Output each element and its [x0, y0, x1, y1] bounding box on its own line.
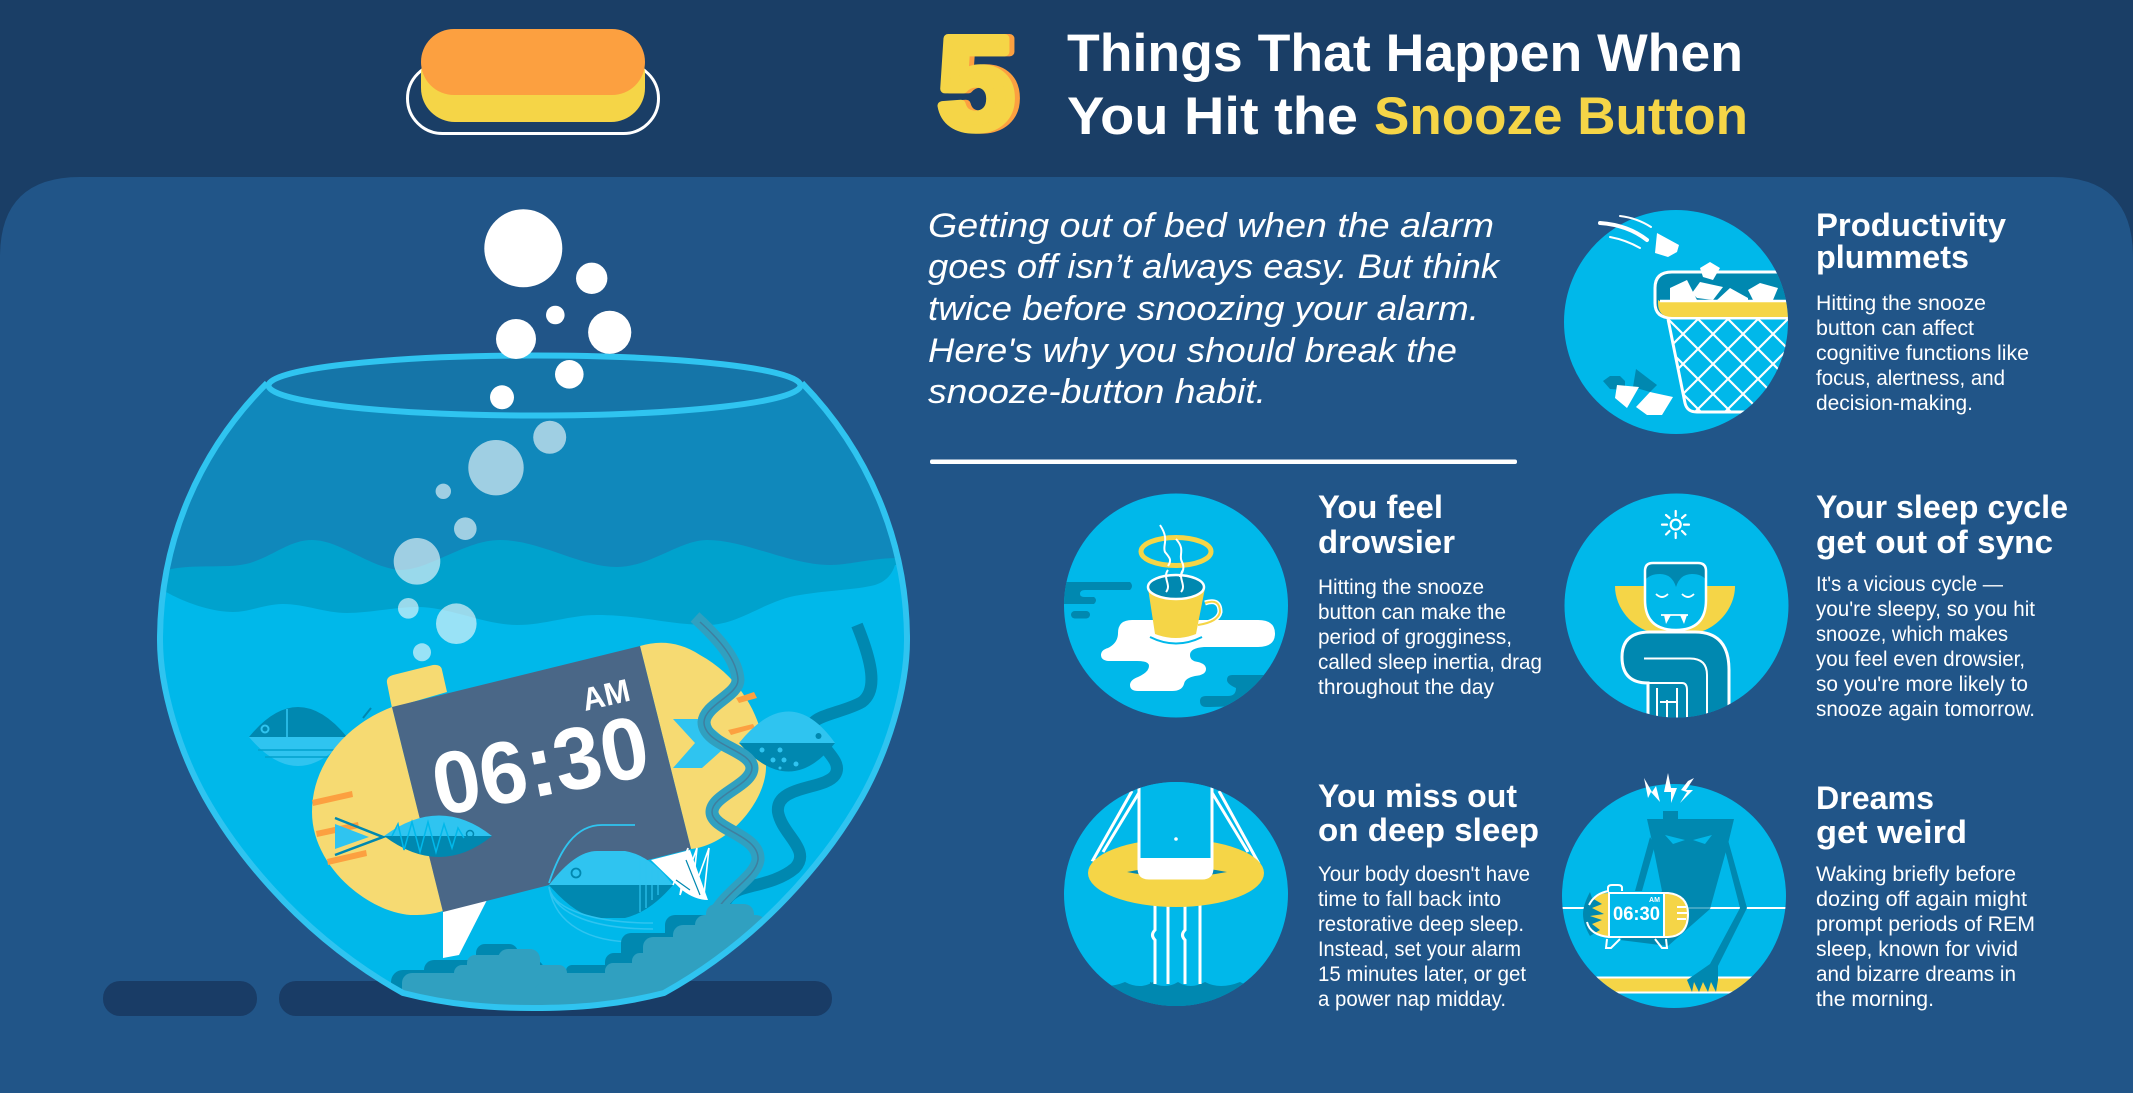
icon: waste basket — [1564, 210, 1800, 434]
body text — [1816, 573, 2035, 721]
panel: you miss out on deep sleep — [1060, 775, 1539, 1016]
clock time: 06:30 — [1613, 904, 1660, 925]
body text: called sleep inertia, drag — [1318, 651, 1542, 674]
body text: button can make the — [1318, 601, 1506, 624]
intro text: Getting out of bed when the alarm — [928, 207, 1494, 245]
icon: snooze button — [408, 29, 658, 134]
intro text — [928, 207, 1501, 411]
heading: get out of sync — [1816, 524, 2053, 560]
body text: period of grogginess, — [1318, 626, 1512, 649]
seaweed: back — [722, 625, 871, 925]
fish: anglerfish — [549, 825, 709, 942]
body text: sleep, known for vivid — [1816, 938, 2018, 961]
alarm clock — [312, 643, 766, 958]
title: Snooze Button — [1374, 87, 1748, 146]
intro text: Here's why you should break the — [928, 332, 1457, 370]
body text: restorative deep sleep. — [1318, 913, 1524, 936]
heading: You miss out — [1318, 778, 1517, 814]
icon: monster and clock — [1562, 773, 1790, 1008]
intro text: twice before snoozing your alarm. — [928, 290, 1479, 328]
icon: phone and swim ring — [1064, 782, 1288, 1006]
clock AM label: AM — [1649, 897, 1660, 904]
heading — [1816, 489, 2068, 560]
body text: you're sleepy, so you hit — [1816, 598, 2035, 621]
heading: Your sleep cycle — [1816, 489, 2068, 525]
table shadows — [103, 981, 832, 1016]
bowl rim — [268, 356, 800, 416]
body text: Your body doesn't have — [1318, 863, 1530, 886]
icon: coffee cup — [1060, 494, 1288, 718]
body text: you feel even drowsier, — [1816, 648, 2025, 671]
bubbles: underwater — [394, 421, 566, 661]
body text: focus, alertness, and — [1816, 367, 2005, 390]
heading — [1318, 489, 1455, 560]
clock AM label: AM — [578, 672, 633, 718]
heading — [1318, 778, 1539, 848]
water layers — [163, 388, 904, 982]
body text: button can affect — [1816, 317, 1974, 340]
panel: productivity plummets — [1564, 207, 2029, 434]
clock time: 06:30 — [424, 696, 657, 835]
title — [1067, 24, 1748, 146]
body text: Hitting the snooze — [1816, 292, 1986, 315]
body text: dozing off again might — [1816, 888, 2027, 911]
body text — [1318, 576, 1542, 699]
body text: so you're more likely to — [1816, 673, 2028, 696]
heading: get weird — [1816, 814, 1967, 850]
body text: snooze, which makes — [1816, 623, 2008, 646]
intro text: goes off isn’t always easy. But think — [928, 248, 1501, 286]
body text: 15 minutes later, or get — [1318, 963, 1526, 986]
body text: and bizarre dreams in — [1816, 963, 2016, 986]
title: Things That Happen When — [1067, 24, 1743, 83]
body text: Instead, set your alarm — [1318, 938, 1521, 961]
icon: sleeping vampire — [1564, 494, 1788, 720]
seaweed: front — [695, 617, 758, 925]
heading — [1816, 780, 1967, 850]
body text: Hitting the snooze — [1318, 576, 1484, 599]
bowl glass outline — [160, 383, 907, 1008]
heading: drowsier — [1318, 524, 1455, 560]
panel: your sleep cycle — [1564, 489, 2068, 721]
heading — [1816, 207, 2006, 275]
body text: decision-making. — [1816, 392, 1973, 415]
gravel — [391, 904, 762, 1005]
bubbles: above water — [484, 209, 631, 409]
intro text: snooze-button habit. — [928, 373, 1266, 411]
title: You Hit the — [1067, 87, 1358, 146]
fish: right spotted — [673, 712, 835, 772]
body text: cognitive functions like — [1816, 342, 2029, 365]
title number 5: 5 — [943, 10, 1019, 156]
fishbowl illustration — [150, 209, 920, 1023]
fish: zigzag — [335, 816, 492, 857]
body text: prompt periods of REM — [1816, 913, 2035, 936]
heading: plummets — [1816, 239, 1969, 275]
heading: Dreams — [1816, 780, 1934, 816]
body text — [1816, 292, 2029, 415]
fish: left dark — [249, 707, 371, 766]
title number 5: 5 — [938, 10, 1014, 156]
body text: throughout the day — [1318, 676, 1494, 699]
heading: Productivity — [1816, 207, 2006, 243]
body text: the morning. — [1816, 988, 1934, 1011]
body text: a power nap midday. — [1318, 988, 1506, 1011]
body text: Waking briefly before — [1816, 863, 2016, 886]
panel: you feel drowsier — [1060, 489, 1542, 718]
body text: time to fall back into — [1318, 888, 1501, 911]
body text: snooze again tomorrow. — [1816, 698, 2035, 721]
heading: You feel — [1318, 489, 1443, 525]
heading: on deep sleep — [1318, 812, 1539, 848]
body text — [1318, 863, 1530, 1011]
panel: dreams get weird — [1562, 773, 2035, 1011]
body text — [1816, 863, 2035, 1011]
body text: It's a vicious cycle — — [1816, 573, 2003, 596]
